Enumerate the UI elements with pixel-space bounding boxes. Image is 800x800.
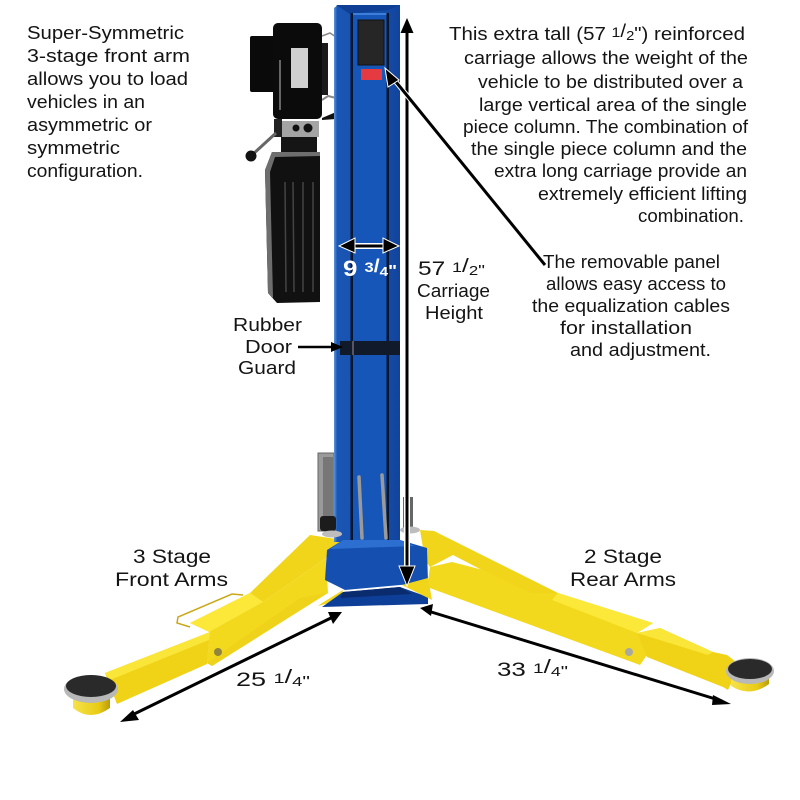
label: rear arm length: 33 [497,660,518,681]
text: removable panel description: and adjustment. [570,340,711,360]
door guard arrow [298,342,343,352]
text: carriage description: carriage allows the weight of the [464,48,748,68]
carriage height arrow [399,18,415,586]
text: carriage description: ") reinforced [634,24,732,44]
label: rear arms: Rear Arms [570,570,676,591]
text: removable panel description: The removable panel [543,252,720,272]
text: front arm description: Super-Symmetric [27,23,184,43]
front arm dimension arrow [120,612,342,722]
text: carriage description: 1 [612,24,621,40]
base [320,497,432,607]
text: carriage description: / [620,21,626,41]
panel window [358,20,384,65]
label: front arms [115,547,228,591]
label: carriage height: " [478,262,485,279]
text: removable panel description [532,252,730,360]
text: carriage description: vehicle to be distributed over a [478,72,744,92]
front left arm: 3 stage [64,535,343,715]
text: removable panel description: allows easy access to [546,274,726,294]
side bracket [318,453,334,531]
removable panel arrow [385,68,545,265]
text: front arm description: vehicles in an [27,92,145,112]
rear arm dimension arrow [420,604,731,705]
label: column width: " [388,263,397,280]
label: front arm length: " [302,673,310,690]
label: rear arm length: / [544,657,552,678]
label: rear arm length: 1 [533,660,544,676]
label: carriage height: / [462,256,470,277]
column [334,5,400,542]
label: front arm length: 4 [292,674,302,689]
label: carriage height: 1 [452,259,462,275]
text: carriage description: piece column. The combination of [463,117,749,137]
text: carriage description: extra long carriage provide an [494,161,747,181]
label: rear arms: 2 Stage [584,547,662,568]
label: front arms: Front Arms [115,570,228,591]
label: rear arm length: " [561,663,568,680]
text: front arm description: 3-stage front arm [27,46,190,66]
label: carriage height [417,256,490,323]
label: rear arms [570,547,676,591]
label: carriage height: 57 [418,259,439,280]
label: carriage height: Carriage [417,281,490,301]
text: carriage description: the single piece column and the [471,139,747,159]
text: carriage description: This extra tall (57 [449,24,587,44]
text: carriage description: combination. [638,206,744,226]
warning label [361,69,382,80]
label: front arm length: / [285,667,293,688]
label: column width: 3 [365,259,374,275]
text: removable panel description: the equalization cables [532,296,730,316]
label: front arm length: 1 [274,670,285,686]
text: carriage description: extremely efficient lifting [538,184,747,204]
label: rubber door guard: Guard [238,358,296,378]
label: column width: / [374,256,380,276]
label: rubber door guard: Rubber [233,315,302,335]
column width arrow [339,238,399,253]
label: front arm length: 25 [236,670,257,691]
label: rubber door guard [233,315,302,378]
label: front arms: 3 Stage [133,547,211,568]
text: front arm description: allows you to load [27,69,188,89]
label: rear arm length: 4 [551,664,561,679]
text: removable panel description: for installation [560,318,692,338]
text: front arm description [27,23,190,181]
text: carriage description: large vertical area of the single [479,95,747,115]
label: carriage height: 2 [469,263,478,278]
label: rubber door guard: Door [245,337,292,357]
hydraulic power unit [246,23,336,303]
text: front arm description: configuration. [27,161,143,181]
text: carriage description [449,21,749,226]
text: front arm description: symmetric [27,138,120,158]
label: carriage height: Height [425,303,483,323]
label: column width: 9 [343,256,355,281]
rods in column [359,475,386,538]
label: column width: 4 [380,264,389,279]
text: front arm description: asymmetric or [27,115,152,135]
rubber door guard [340,341,400,355]
text: carriage description: 2 [626,28,634,43]
rear right arm: 2 stage [420,530,774,692]
